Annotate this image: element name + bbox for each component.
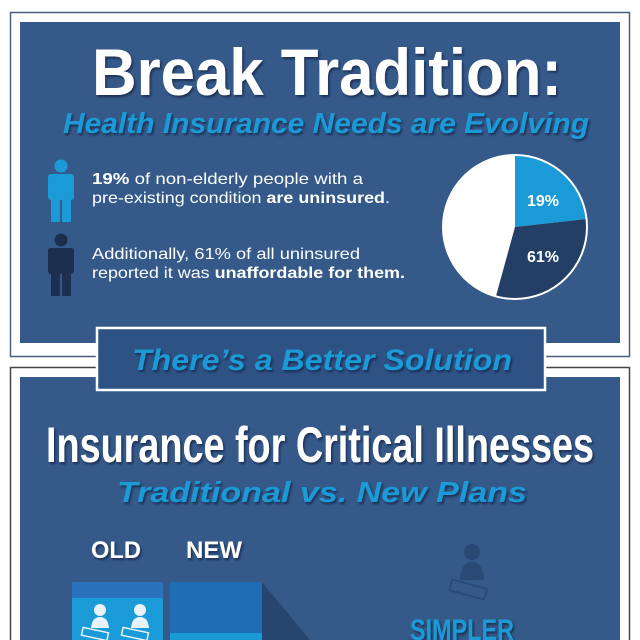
bar: new shadow (262, 582, 310, 640)
bar: old (72, 582, 163, 640)
icon: stamps (81, 604, 149, 640)
subtitle: Health Insurance Needs are Evolving (63, 108, 589, 140)
text: stat 2: Additionally, 61% of all uninsured (92, 246, 360, 263)
panel: top frame (10, 12, 630, 356)
pie chart: 61% (527, 249, 559, 266)
title: Break Tradition: (92, 35, 562, 109)
text: stat 1: pre-existing condition are uninsured . (92, 190, 390, 207)
panel: bottom frame (10, 368, 630, 640)
label: OLD: OLD (91, 537, 141, 564)
text: stat 1: 19% of non-elderly people with a (92, 171, 363, 188)
banner: better solution: There’s a Better Solution (132, 344, 512, 377)
icon: light person (48, 160, 74, 222)
pie chart: 19% (527, 193, 559, 210)
icon: dark person (48, 234, 74, 296)
banner: better solution (97, 328, 545, 390)
label: NEW: NEW (186, 537, 242, 564)
bar: new (170, 582, 262, 640)
pie chart (443, 155, 587, 299)
subheading: Traditional vs. New Plans (117, 477, 527, 509)
text: stat 2: reported it was unaffordable for them. (92, 265, 405, 282)
icon: faint stamp (449, 544, 487, 599)
text: stat 2 (92, 246, 405, 282)
text: stat 1 (92, 171, 390, 207)
